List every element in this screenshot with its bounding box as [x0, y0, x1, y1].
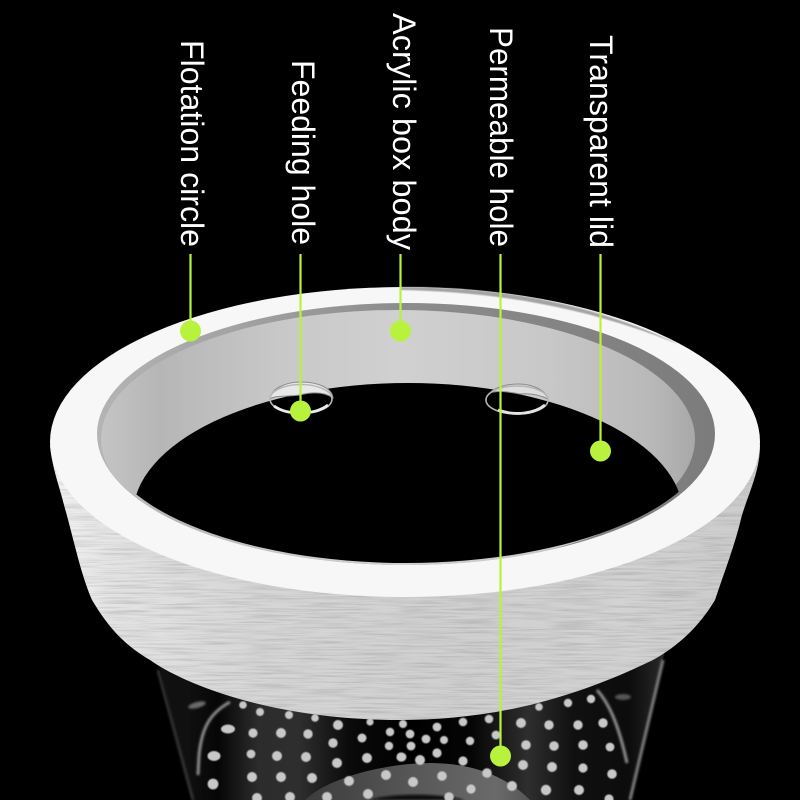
label: Acrylic box body: Acrylic box body: [386, 13, 422, 250]
label: Feeding hole: [285, 60, 321, 422]
back rim shading: [400, 287, 680, 345]
acrylic wall: [101, 310, 695, 568]
label: Permeable hole: [483, 27, 519, 766]
label: Flotation circle: [174, 40, 210, 342]
acrylic box lower body with perforations: [157, 650, 665, 800]
perforation dots: [208, 695, 617, 800]
label: Feeding hole: Feeding hole: [285, 60, 321, 245]
lid rim: [97, 303, 715, 565]
edge highlight right: [630, 660, 663, 800]
smear right: [615, 694, 631, 700]
flotation ring outer side band: [50, 445, 760, 720]
curved reflection right: [597, 690, 627, 763]
label: Transparent lid: [583, 35, 619, 462]
dark centre under dome: [370, 795, 465, 800]
inner dome reflection: [305, 763, 530, 800]
label: Transparent lid: Transparent lid: [583, 35, 619, 248]
permeable hole shape: [486, 384, 548, 414]
feeding hole shape: [270, 382, 333, 414]
curved reflection left: [198, 702, 230, 775]
dark interior: [136, 383, 679, 563]
smear left: [188, 700, 206, 710]
flotation ring top face: [50, 287, 760, 597]
label: Permeable hole: Permeable hole: [483, 27, 519, 247]
inner opening: wall and floor: [97, 303, 715, 565]
edge highlight left: [158, 670, 193, 800]
label: Flotation circle: Flotation circle: [174, 40, 210, 247]
